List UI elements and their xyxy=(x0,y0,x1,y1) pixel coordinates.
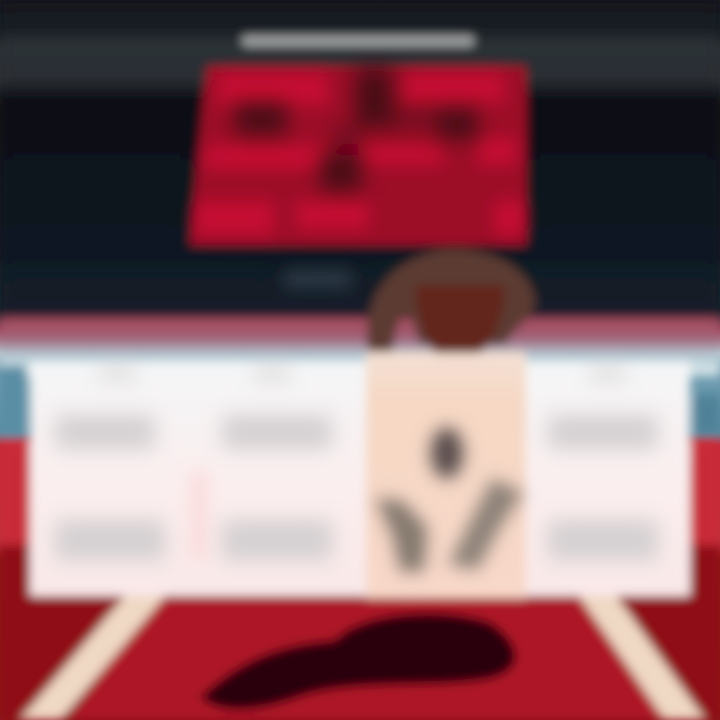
card 1 text xyxy=(55,368,165,560)
court line left xyxy=(20,590,170,720)
athlete torso xyxy=(415,285,505,353)
gap tint between cards xyxy=(190,470,208,560)
cards panel background xyxy=(30,362,690,596)
card 4 text xyxy=(548,368,658,560)
card 3 with athlete xyxy=(366,249,535,598)
subtitle xyxy=(242,36,474,46)
card 2 text xyxy=(222,368,332,560)
jersey emblem xyxy=(430,427,464,479)
arena background xyxy=(0,0,720,330)
shadow on floor xyxy=(200,613,516,710)
court line right xyxy=(575,590,705,720)
caption under title xyxy=(283,272,353,286)
court floor xyxy=(0,318,720,720)
athlete arms xyxy=(367,249,535,352)
title block xyxy=(190,66,526,245)
athlete leg left xyxy=(375,498,428,572)
athlete leg right xyxy=(448,478,524,570)
